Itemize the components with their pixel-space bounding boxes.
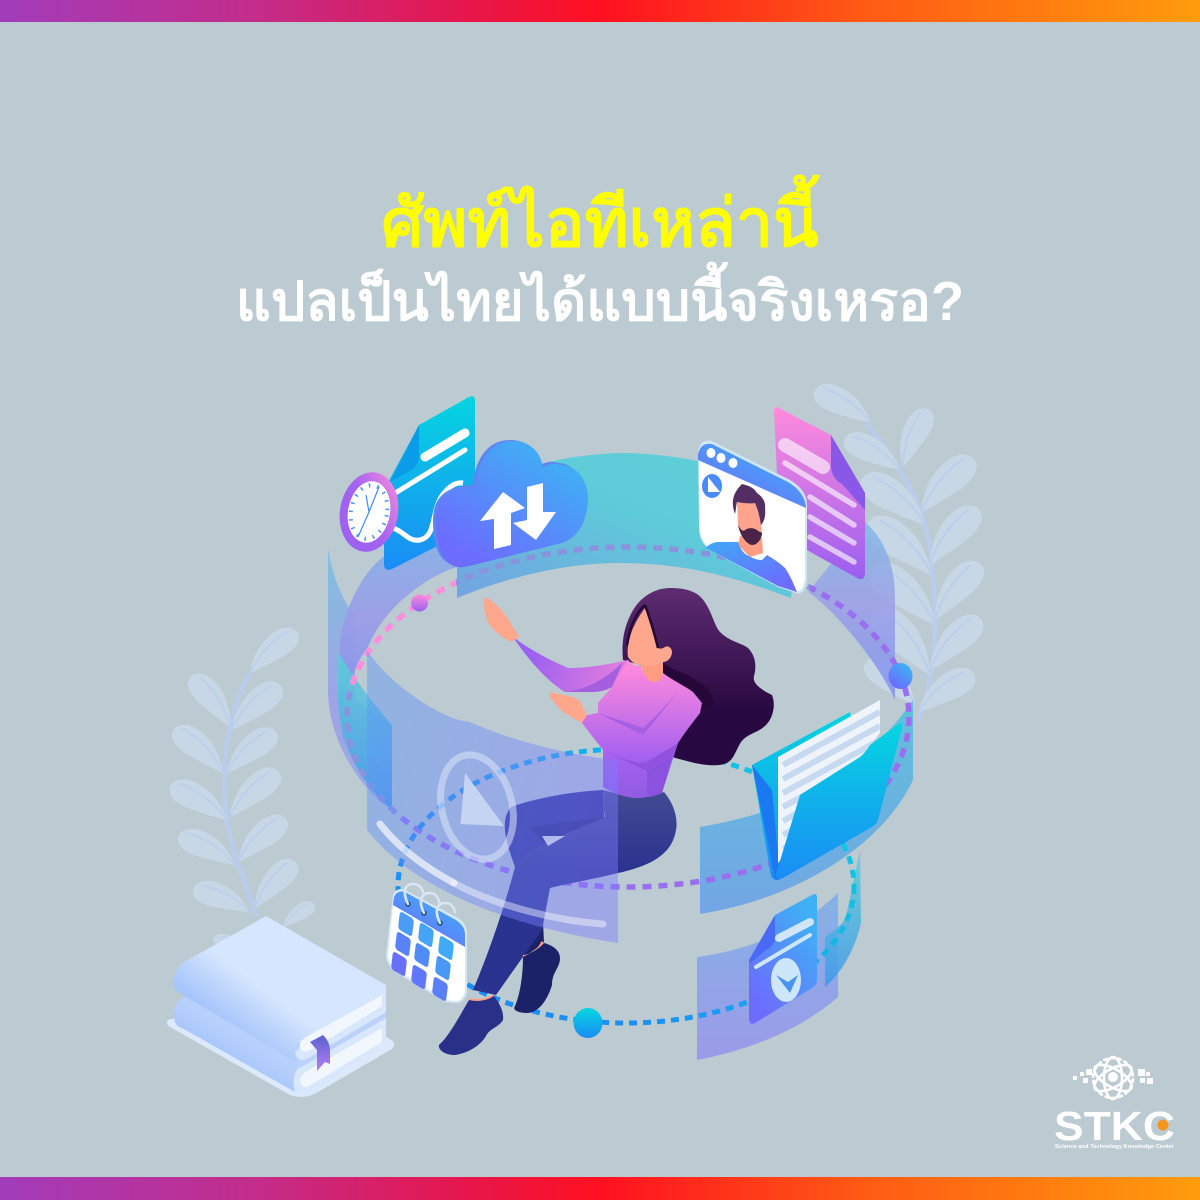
bottom gradient bar bbox=[0, 1177, 1200, 1200]
play triangle bbox=[460, 773, 504, 826]
far shoe bbox=[514, 943, 560, 1013]
lower hand bbox=[550, 692, 587, 723]
title line 1: ศัพท์ไอทีเหล่านี้ bbox=[381, 187, 819, 261]
far leg lower bbox=[520, 900, 544, 958]
small right strip bbox=[825, 850, 861, 987]
icon: pink document bbox=[774, 407, 865, 579]
icon: small check document bbox=[749, 894, 817, 1024]
icon: clock bbox=[333, 468, 405, 556]
book base bbox=[167, 990, 394, 1097]
white arc bbox=[380, 824, 603, 924]
gap between books bbox=[297, 1010, 386, 1068]
logo emblem bbox=[1090, 1057, 1136, 1099]
near leg and hip bbox=[473, 790, 677, 995]
sweater bbox=[582, 660, 702, 798]
hem fold bbox=[603, 743, 678, 771]
near sock bbox=[469, 996, 494, 1001]
hair shadow bbox=[660, 660, 714, 720]
icon: video window with man bbox=[698, 440, 807, 593]
raised hand bbox=[484, 597, 519, 642]
logo pixels bbox=[1073, 1069, 1153, 1084]
lower book pages bbox=[300, 1028, 382, 1087]
lower purple ribbon bbox=[697, 893, 838, 1060]
dot: teal node bbox=[574, 1008, 602, 1038]
left teal strip bbox=[338, 652, 392, 810]
dot: pink node bbox=[411, 594, 428, 612]
icon: open folder bbox=[752, 700, 902, 880]
right plant bbox=[809, 377, 990, 722]
raised arm shadow bbox=[565, 662, 623, 692]
woman bbox=[439, 588, 774, 1055]
icon: cloud with arrows bbox=[433, 440, 588, 567]
hair strand bbox=[627, 605, 658, 648]
lower book rim bbox=[294, 1018, 386, 1094]
lower right ribbon bbox=[700, 700, 913, 914]
upper book cover bbox=[173, 916, 386, 1062]
upper book pages bbox=[300, 993, 382, 1052]
left crescent bbox=[328, 548, 392, 810]
right outer ring band bbox=[808, 522, 895, 700]
title line 2: แปลเป็นไทยได้แบบนี้จริงเหรอ? bbox=[236, 271, 964, 332]
hip shade bbox=[647, 758, 672, 797]
far thigh shadow bbox=[515, 817, 605, 866]
neck bbox=[640, 662, 663, 682]
icon: teal chart document bbox=[384, 396, 475, 570]
far sock bbox=[523, 942, 543, 957]
top gradient bar bbox=[0, 0, 1200, 22]
logo: STKC bbox=[1054, 1057, 1175, 1150]
face bbox=[628, 608, 672, 666]
knee gap bbox=[542, 836, 565, 846]
front translucent band bbox=[367, 650, 618, 943]
books bbox=[167, 916, 394, 1097]
lower book spine bbox=[174, 990, 310, 1092]
hair bbox=[622, 588, 774, 765]
back teal band bbox=[457, 453, 800, 598]
raised arm bbox=[513, 637, 628, 692]
left plant bbox=[165, 621, 318, 947]
logo orange dot bbox=[1158, 1120, 1168, 1130]
logo tagline: Science and Technology Knowledge Center bbox=[1055, 1144, 1175, 1150]
left outer ring band bbox=[339, 510, 460, 747]
bookmark bbox=[310, 1035, 330, 1071]
play button ring bbox=[430, 747, 524, 867]
logo wordmark: STKC bbox=[1054, 1103, 1175, 1149]
dot: blue node bbox=[888, 663, 912, 689]
upper dashed orbit bbox=[347, 547, 909, 887]
illustration bbox=[167, 384, 1174, 1149]
near shoe bbox=[439, 996, 503, 1055]
sleeve fold bbox=[598, 692, 678, 735]
far thigh bbox=[505, 790, 605, 867]
lower dashed orbit bbox=[398, 749, 854, 1023]
upper book lip bbox=[295, 990, 386, 1060]
icon: calendar bbox=[386, 884, 467, 1003]
